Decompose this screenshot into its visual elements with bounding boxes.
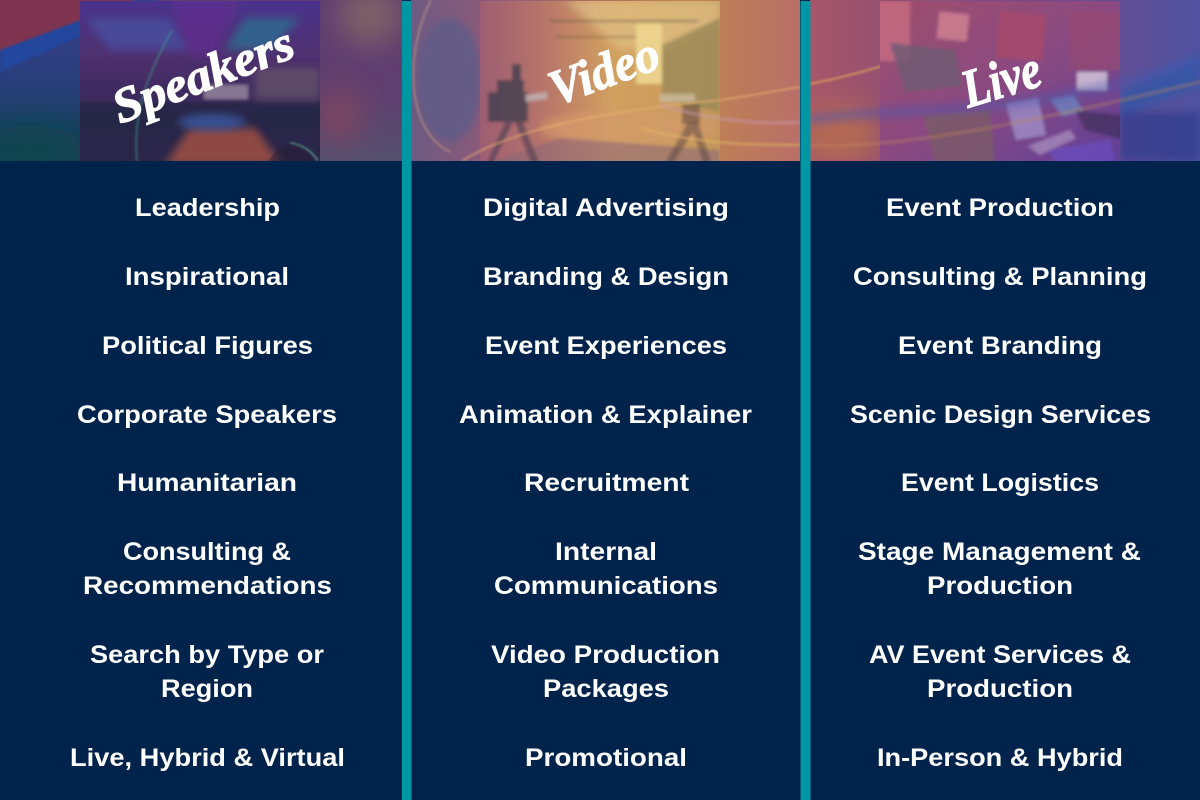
- list: live: Event Branding: [898, 332, 1102, 360]
- list: video: Recruitment: [524, 469, 690, 497]
- panel: live header image: [800, 0, 1200, 165]
- list: live: Production: [927, 675, 1073, 703]
- panel: speakers header image: [0, 0, 402, 174]
- divider: left teal bar: [402, 1, 412, 800]
- divider: right teal bar: [800, 1, 810, 800]
- list: video: Internal: [555, 538, 657, 566]
- list: live: Scenic Design Services: [850, 401, 1151, 429]
- photo: video studio with cameras: [480, 1, 720, 161]
- heading: Speakers: Speakers: [104, 15, 301, 134]
- list: live: Event Production: [886, 194, 1114, 222]
- list: live: AV Event Services &: [869, 641, 1131, 669]
- list: speakers: Search by Type or: [90, 641, 324, 669]
- list: live: Event Logistics: [901, 469, 1099, 497]
- list: video: Video Production: [491, 641, 720, 669]
- list: speakers: Live, Hybrid & Virtual: [70, 744, 345, 772]
- list: live: Consulting & Planning: [853, 263, 1147, 291]
- list: video: Packages: [543, 675, 669, 703]
- list: video: [459, 194, 752, 772]
- heading: Live: Live: [953, 39, 1048, 120]
- list: video: Promotional: [525, 744, 687, 772]
- list: speakers: Leadership: [135, 194, 280, 222]
- list: video: Digital Advertising: [483, 194, 729, 222]
- list: speakers: Region: [161, 675, 253, 703]
- list: speakers: Recommendations: [83, 572, 332, 600]
- list: speakers: [70, 194, 345, 772]
- photo: conference hall: [80, 1, 320, 161]
- list: video: Event Experiences: [485, 332, 727, 360]
- list: speakers: Inspirational: [125, 263, 289, 291]
- list: video: Communications: [494, 572, 718, 600]
- list: live: In-Person & Hybrid: [877, 744, 1123, 772]
- list: video: Animation & Explainer: [459, 401, 752, 429]
- list: video: Branding & Design: [483, 263, 729, 291]
- photo: live production control room: [880, 1, 1120, 161]
- list: speakers: Corporate Speakers: [77, 401, 337, 429]
- list: live: Production: [927, 572, 1073, 600]
- list: speakers: Humanitarian: [117, 469, 297, 497]
- heading: Video: Video: [541, 25, 667, 116]
- list: speakers: Political Figures: [102, 332, 313, 360]
- list: live: Stage Management &: [858, 538, 1141, 566]
- list: live: [850, 194, 1151, 772]
- list: speakers: Consulting &: [123, 538, 291, 566]
- panel: video header image: [411, 0, 800, 165]
